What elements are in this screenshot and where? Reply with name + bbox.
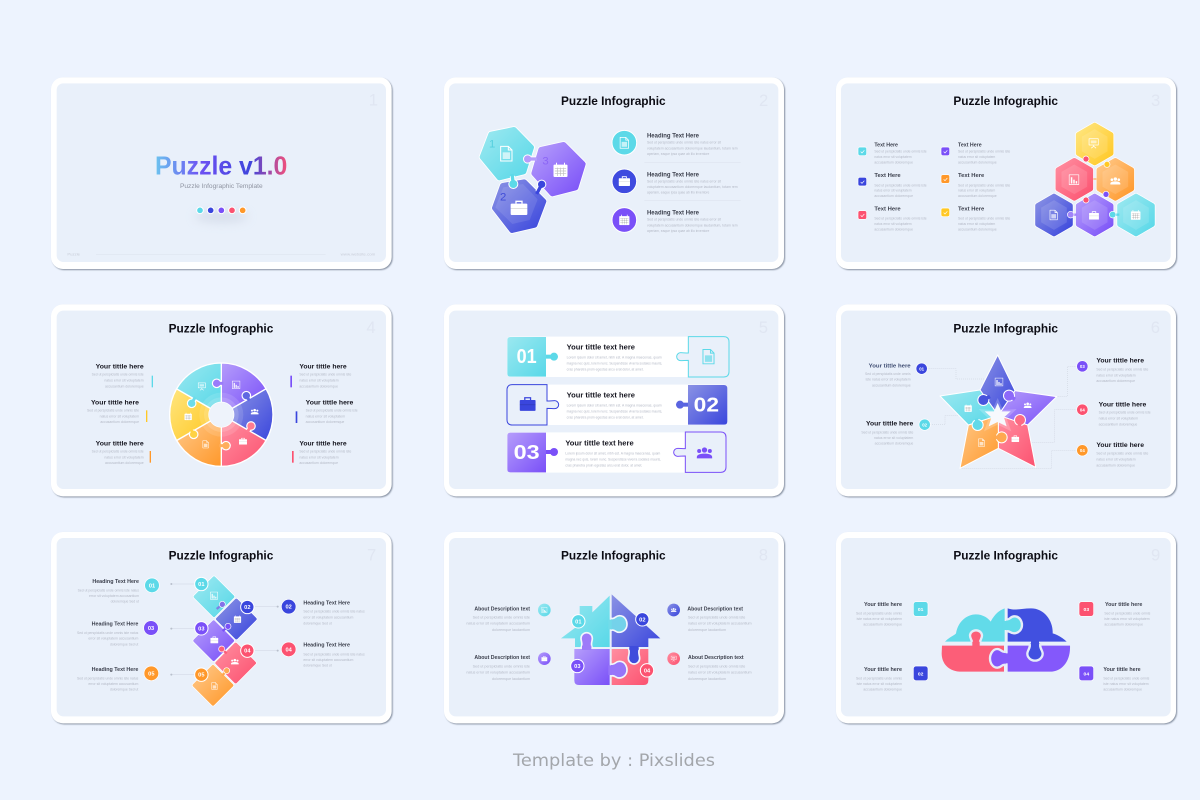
item bottom left: About Description text bbox=[474, 655, 530, 661]
row 01: cras pharetra proin egestas arcu erat dolor, at amet. bbox=[567, 367, 644, 371]
row 01: magna nec quis, lorem nunc. Suspendisse viverra sodales mauris, bbox=[567, 362, 662, 366]
item 04: 04 bbox=[286, 647, 293, 653]
label 04: Sed ut perspiciatis unde omnis iste bbox=[1099, 411, 1151, 415]
checklist left column: accusantium doloremque bbox=[874, 194, 913, 198]
label 05: accusantium doloremque bbox=[1096, 463, 1135, 467]
label 03: accusantium doloremque bbox=[1096, 379, 1135, 383]
checklist left column: natus error sit voluptatem bbox=[874, 155, 912, 159]
item bottom left: Sed ut perspiciatis unde omnis iste bbox=[473, 664, 530, 668]
item 01: doloremque Sed ut bbox=[111, 600, 139, 604]
label 05 bbox=[1077, 442, 1148, 467]
row 03: Lorem ipsum dolor sit amet, nibh est. A magna maecenas, quam bbox=[565, 452, 661, 456]
item 01: Your tittle here bbox=[864, 602, 902, 608]
label 05: natus error sit voluptatem bbox=[1096, 457, 1136, 461]
panel: slide 4 puzzle wheel bbox=[51, 304, 393, 497]
item 01: Sed ut perspiciatis unde omnis iste natus bbox=[78, 588, 139, 592]
title: Puzzle Infographic bbox=[169, 321, 274, 335]
row 01 bbox=[507, 337, 729, 377]
diamond puzzle pieces bbox=[194, 577, 255, 704]
item 05: error sit voluptatem accusantium bbox=[88, 682, 139, 686]
item 3: aperiam, eaque ipsa quae ab illo inventore bbox=[647, 229, 709, 233]
label 02: Sed ut perspiciatis unde omnis iste bbox=[861, 430, 913, 434]
panel: slide 3 hexagon pyramid bbox=[836, 77, 1177, 270]
checklist right column: Text Here bbox=[958, 206, 984, 212]
title: Puzzle Infographic bbox=[561, 94, 666, 108]
label left 2: natus error sit voluptatem bbox=[100, 414, 139, 418]
checklist right column: accusantium doloremque bbox=[958, 227, 997, 231]
puzzle cloud bbox=[942, 608, 1070, 672]
item 2: aperiam, eaque ipsa quae ab illo inventore bbox=[647, 191, 709, 195]
checklist left column: accusantium doloremque bbox=[874, 227, 913, 231]
checklist left column: Text Here bbox=[874, 143, 898, 149]
item top right: Sed ut perspiciatis unde omnis iste bbox=[688, 615, 745, 619]
checklist left column: Sed ut perspiciatis unde omnis iste bbox=[874, 217, 927, 221]
item 03: Sed ut perspiciatis unde omnis iste natus bbox=[77, 631, 139, 635]
connector lines bbox=[170, 583, 279, 676]
label right 3: Your tittle here bbox=[299, 440, 347, 447]
label 03: Sed ut perspiciatis unde omnis iste bbox=[1096, 368, 1148, 372]
item 03: accusantium doloremque bbox=[1104, 623, 1143, 627]
panel: slide 5 puzzle rows bbox=[444, 304, 785, 497]
row 01: 01 bbox=[517, 346, 537, 368]
row 03: magna nec quis, lorem nunc. Suspendisse viverra sodales mauris, bbox=[565, 457, 661, 461]
puzzle star bbox=[940, 355, 1057, 468]
label 01 bbox=[865, 363, 927, 387]
item 3: Heading Text Here bbox=[647, 210, 700, 216]
item top left: About Description text bbox=[474, 606, 530, 612]
label 01: 01 bbox=[919, 366, 925, 371]
puzzle house: 03 bbox=[574, 664, 580, 670]
item 02: Sed ut perspiciatis unde omnis iste natus bbox=[303, 610, 365, 614]
label left 1: Your tittle here bbox=[96, 364, 144, 371]
label 02: 02 bbox=[922, 422, 928, 427]
slide number: 3 bbox=[1151, 91, 1160, 110]
row 03: cras pharetra proin egestas arcu erat dolor, at amet. bbox=[565, 463, 642, 467]
checklist right column: Text Here bbox=[958, 143, 982, 149]
item 02: 02 bbox=[918, 671, 924, 677]
puzzle house: 01 bbox=[575, 619, 581, 625]
label right 3: accusantium doloremque bbox=[299, 461, 338, 465]
item 03: error sit voluptatem accusantium bbox=[88, 637, 139, 641]
checklist left column: Text Here bbox=[874, 206, 901, 212]
item 2: Sed ut perspiciatis unde omnis iste natus error sit bbox=[647, 179, 721, 183]
checklist left column: natus error sit voluptatem bbox=[874, 222, 912, 226]
row 03: Your tittle text here bbox=[565, 440, 634, 447]
label right 2 bbox=[296, 399, 358, 424]
item 02: error sit voluptatem accusantium bbox=[303, 616, 354, 620]
puzzle house: 04 bbox=[644, 668, 651, 674]
item 02 bbox=[856, 666, 928, 692]
item 03 bbox=[1079, 602, 1151, 627]
label 02 bbox=[861, 419, 930, 446]
item 01: Sed ut perspiciatis unde omnis bbox=[856, 611, 902, 615]
label left 2: accusantium doloremque bbox=[100, 420, 139, 424]
item top right: doloremque laudantium bbox=[688, 628, 726, 632]
row 02 bbox=[507, 385, 728, 425]
puzzle wheel bbox=[170, 363, 273, 466]
label left 3: accusantium doloremque bbox=[105, 461, 144, 465]
hexagon puzzle: 2 bbox=[500, 192, 506, 204]
item 05: Sed ut perspiciatis unde omnis iste natus bbox=[77, 676, 139, 680]
item 2: Heading Text Here bbox=[647, 172, 700, 178]
item bottom left: doloremque laudantium bbox=[492, 677, 530, 681]
label 05: Sed ut perspiciatis unde omnis iste bbox=[1096, 452, 1148, 456]
label right 3 bbox=[292, 440, 351, 465]
item bottom right: doloremque laudantium bbox=[688, 677, 726, 681]
credit line: Template by : Pixslides bbox=[512, 751, 715, 771]
label 03: Your tittle here bbox=[1096, 358, 1144, 365]
label 04: accusantium doloremque bbox=[1099, 422, 1137, 426]
hexagon puzzle: 1 bbox=[489, 138, 495, 150]
item 05 bbox=[77, 666, 159, 692]
diamond puzzle pieces: 01 bbox=[198, 582, 204, 588]
diamond puzzle pieces: 03 bbox=[198, 626, 204, 632]
slide number: 2 bbox=[759, 91, 768, 110]
cover title: Puzzle v1.0 bbox=[155, 150, 287, 180]
item 04: doloremque Sed ut bbox=[303, 664, 332, 668]
label 04 bbox=[1077, 401, 1151, 426]
item top left bbox=[466, 604, 551, 632]
item 04: Sed ut perspiciatis unde omnis bbox=[1103, 676, 1150, 680]
item 04: accusantium doloremque bbox=[1103, 688, 1142, 692]
label right 1: natus error sit voluptatem bbox=[299, 379, 339, 383]
label left 1: Sed ut perspiciatis unde omnis iste bbox=[92, 373, 144, 377]
diamond puzzle pieces: 05 bbox=[198, 673, 204, 679]
checklist right column: Text Here bbox=[958, 173, 984, 179]
item 02: accusantium doloremque bbox=[863, 688, 902, 692]
item 02: 02 bbox=[286, 605, 292, 611]
checklist left column: accusantium doloremque bbox=[874, 160, 913, 164]
item 03 bbox=[77, 621, 158, 646]
checklist left column: Sed ut perspiciatis unde omnis iste bbox=[874, 150, 927, 154]
item 02: iste natus error sit voluptatem bbox=[857, 682, 902, 686]
label right 1: Sed ut perspiciatis unde omnis iste bbox=[299, 373, 351, 377]
checklist left column: Text Here bbox=[874, 173, 901, 179]
row 03 bbox=[507, 432, 726, 473]
item bottom right bbox=[667, 652, 752, 681]
item 03: Your tittle here bbox=[1105, 602, 1142, 608]
item 01: error sit voluptatem accusantium bbox=[89, 594, 139, 598]
item 05: 05 bbox=[148, 671, 154, 677]
label right 3: natus error sit voluptatem bbox=[299, 455, 339, 459]
item 3 bbox=[612, 200, 741, 233]
checklist left column: Sed ut perspiciatis unde omnis iste bbox=[874, 183, 927, 187]
item 1 bbox=[612, 130, 738, 156]
row 01: Lorem ipsum dolor sit amet, nibh est. A magna maecenas, quam bbox=[567, 356, 662, 360]
item 01: 01 bbox=[149, 583, 155, 589]
item 2: voluptatem accusantium doloremque laudantium, totam rem bbox=[647, 185, 738, 189]
label right 2: Your tittle here bbox=[306, 399, 354, 406]
row 02: Lorem ipsum dolor sit amet, nibh est. A magna maecenas, quam bbox=[567, 404, 662, 408]
diamond puzzle pieces: 04 bbox=[244, 649, 251, 655]
label 04: 04 bbox=[1080, 407, 1085, 412]
title: Puzzle Infographic bbox=[953, 94, 1058, 108]
checklist right column bbox=[941, 143, 1010, 231]
cover footer: www.website.com bbox=[341, 252, 376, 257]
checklist left column: natus error sit voluptatem bbox=[874, 189, 912, 193]
slide number: 1 bbox=[369, 91, 378, 110]
label 05: 04 bbox=[1080, 448, 1085, 453]
label left 3: Sed ut perspiciatis unde omnis iste bbox=[92, 450, 144, 454]
label 02: Your tittle here bbox=[866, 421, 914, 428]
item 01: iste natus error sit voluptatem bbox=[857, 617, 902, 621]
label right 1: Your tittle here bbox=[299, 364, 347, 371]
hexagon puzzle bbox=[482, 130, 583, 230]
item 01: Heading Text Here bbox=[92, 579, 139, 585]
title: Puzzle Infographic bbox=[561, 549, 666, 563]
puzzle house bbox=[561, 594, 660, 685]
slide number: 4 bbox=[366, 318, 376, 337]
slide number: 6 bbox=[1151, 318, 1160, 337]
label right 2: Sed ut perspiciatis unde omnis iste bbox=[306, 409, 358, 413]
label 04: natus error sit voluptatem bbox=[1099, 416, 1138, 420]
item top left: doloremque laudantium bbox=[492, 628, 530, 632]
checklist right column: accusantium doloremque bbox=[958, 194, 997, 198]
item 03: 03 bbox=[148, 626, 154, 632]
label right 2: natus error sit voluptatem bbox=[306, 414, 345, 418]
checklist right column: Sed ut perspiciatis unde omnis iste bbox=[958, 183, 1010, 187]
item top right: About Description text bbox=[687, 606, 743, 612]
checklist right column: Sed ut perspiciatis unde omnis iste bbox=[958, 217, 1010, 221]
item 03: Sed ut perspiciatis unde omnis bbox=[1104, 611, 1151, 615]
item 03: Heading Text Here bbox=[92, 622, 138, 628]
row 03: 03 bbox=[514, 442, 540, 464]
item 01: 01 bbox=[918, 607, 924, 613]
slide number: 8 bbox=[759, 545, 768, 564]
item bottom right: About Description text bbox=[688, 655, 744, 661]
item 1: aperiam, eaque ipsa quae ab illo inventore bbox=[647, 152, 709, 156]
panel: slide 6 puzzle star bbox=[836, 304, 1177, 497]
hexagon puzzle: 3 bbox=[542, 155, 549, 167]
item 04 bbox=[281, 642, 365, 668]
title: Puzzle Infographic bbox=[169, 549, 274, 563]
item bottom left bbox=[466, 652, 551, 681]
item 02: Your tittle here bbox=[864, 667, 902, 673]
label 01: Your tittle here bbox=[869, 364, 911, 370]
panel: slide 2 hexagons bbox=[444, 77, 785, 270]
slide number: 7 bbox=[367, 545, 376, 564]
label 03: natus error sit voluptatem bbox=[1096, 373, 1136, 377]
cover footer: Puzzle bbox=[67, 252, 81, 257]
item 01: accusantium doloremque bbox=[863, 623, 902, 627]
label right 2: accusantium doloremque bbox=[306, 420, 344, 424]
item 02 bbox=[281, 599, 365, 625]
checklist right column: natus error sit voluptatem bbox=[958, 155, 996, 159]
item top left: natus error sit voluptatem accusantium bbox=[466, 622, 530, 626]
item 02: doloremque Sed ut bbox=[303, 621, 332, 625]
panel: slide 9 puzzle cloud bbox=[836, 532, 1177, 724]
item 04: 04 bbox=[1084, 671, 1089, 677]
colour dots bbox=[195, 207, 248, 223]
row 02: 02 bbox=[694, 394, 719, 416]
item 03: 03 bbox=[1084, 607, 1089, 613]
label 01: iste natus error sit voluptatem bbox=[866, 378, 911, 382]
label 01: accusantium doloremque bbox=[872, 383, 911, 387]
checklist left column bbox=[858, 143, 927, 231]
item 02: Heading Text Here bbox=[303, 600, 350, 606]
label left 1 bbox=[92, 364, 153, 388]
item 05: Heading Text Here bbox=[92, 667, 138, 673]
item 1: voluptatem accusantium doloremque laudantium, totam rem bbox=[647, 146, 738, 150]
item top right bbox=[667, 604, 752, 632]
slide number: 9 bbox=[1151, 545, 1160, 564]
panel: slide 7 diamond chain bbox=[51, 532, 393, 724]
label right 1: accusantium doloremque bbox=[299, 384, 338, 388]
item 2 bbox=[612, 162, 741, 195]
item 03: iste natus error sit voluptatem bbox=[1104, 617, 1150, 621]
item 04: iste natus error sit voluptatem bbox=[1103, 682, 1149, 686]
title: Puzzle Infographic bbox=[953, 549, 1058, 563]
item 01 bbox=[78, 578, 159, 604]
item bottom right: Sed ut perspiciatis unde omnis iste bbox=[688, 664, 745, 668]
item 03: doloremque Sed ut bbox=[110, 642, 138, 646]
label left 2: Your tittle here bbox=[91, 399, 139, 406]
row 02: magna nec quis, lorem nunc. Suspendisse viverra sodales mauris, bbox=[567, 409, 662, 413]
label left 3: Your tittle here bbox=[96, 440, 144, 447]
title: Puzzle Infographic bbox=[953, 321, 1058, 335]
item 3: Sed ut perspiciatis unde omnis iste natus error sit bbox=[647, 218, 721, 222]
checklist right column: natus error sit voluptatem bbox=[958, 222, 996, 226]
checklist right column: accusantium doloremque bbox=[958, 160, 997, 164]
label left 1: accusantium doloremque bbox=[105, 384, 144, 388]
label 05: Your tittle here bbox=[1096, 442, 1144, 449]
label 01: Sed ut perspiciatis unde omnis bbox=[865, 372, 911, 376]
panel: slide 8 puzzle house bbox=[444, 532, 785, 724]
item 3: voluptatem accusantium doloremque laudantium, totam rem bbox=[647, 223, 738, 227]
row 01: Your tittle text here bbox=[567, 345, 635, 352]
panel: slide 1 cover bbox=[51, 77, 393, 270]
connectors bbox=[927, 366, 1077, 468]
cover subtitle: Puzzle Infographic Template bbox=[180, 183, 263, 190]
slide number: 5 bbox=[759, 318, 768, 337]
item 04: Your tittle here bbox=[1103, 667, 1141, 673]
label right 1 bbox=[290, 364, 351, 388]
label 03 bbox=[1077, 358, 1148, 383]
item 1: Sed ut perspiciatis unde omnis iste natus error sit bbox=[647, 141, 721, 145]
item top left: Sed ut perspiciatis unde omnis iste bbox=[473, 615, 530, 619]
label 02: accusantium doloremque bbox=[875, 442, 913, 446]
item 04: Heading Text Here bbox=[303, 643, 350, 649]
puzzle house: 02 bbox=[639, 617, 645, 623]
label right 3: Sed ut perspiciatis unde omnis iste bbox=[299, 450, 351, 454]
checklist right column: natus error sit voluptatem bbox=[958, 189, 996, 193]
cover footer bbox=[67, 252, 376, 257]
item top right: natus error sit voluptatem accusantium bbox=[688, 622, 752, 626]
hexagon pyramid bbox=[1038, 125, 1152, 234]
checklist right column: Sed ut perspiciatis unde omnis iste bbox=[958, 150, 1010, 154]
item bottom left: natus error sit voluptatem accusantium bbox=[466, 671, 530, 675]
item 1: Heading Text Here bbox=[647, 134, 700, 140]
label left 3: natus error sit voluptatem bbox=[104, 455, 144, 459]
item 04: error sit voluptatem accusantium bbox=[303, 658, 354, 662]
label 03: 03 bbox=[1080, 364, 1085, 369]
item 05: doloremque Sed ut bbox=[110, 688, 138, 692]
label left 2 bbox=[87, 399, 147, 424]
row 02: Your tittle text here bbox=[567, 393, 635, 400]
item 02: Sed ut perspiciatis unde omnis bbox=[856, 676, 902, 680]
item bottom right: natus error sit voluptatem accusantium bbox=[688, 671, 752, 675]
label left 3 bbox=[92, 440, 151, 465]
diamond puzzle pieces: 02 bbox=[244, 605, 250, 611]
item 04: Sed ut perspiciatis unde omnis iste natus bbox=[303, 652, 365, 656]
label left 2: Sed ut perspiciatis unde omnis iste bbox=[87, 409, 139, 413]
label left 1: natus error sit voluptatem bbox=[104, 379, 144, 383]
item 04 bbox=[1079, 666, 1150, 692]
label 04: Your tittle here bbox=[1099, 401, 1147, 408]
row 02: cras pharetra proin egestas arcu erat dolor, at amet. bbox=[567, 415, 644, 419]
label 02: natus error sit voluptatem bbox=[874, 436, 914, 440]
item 01 bbox=[856, 602, 928, 627]
